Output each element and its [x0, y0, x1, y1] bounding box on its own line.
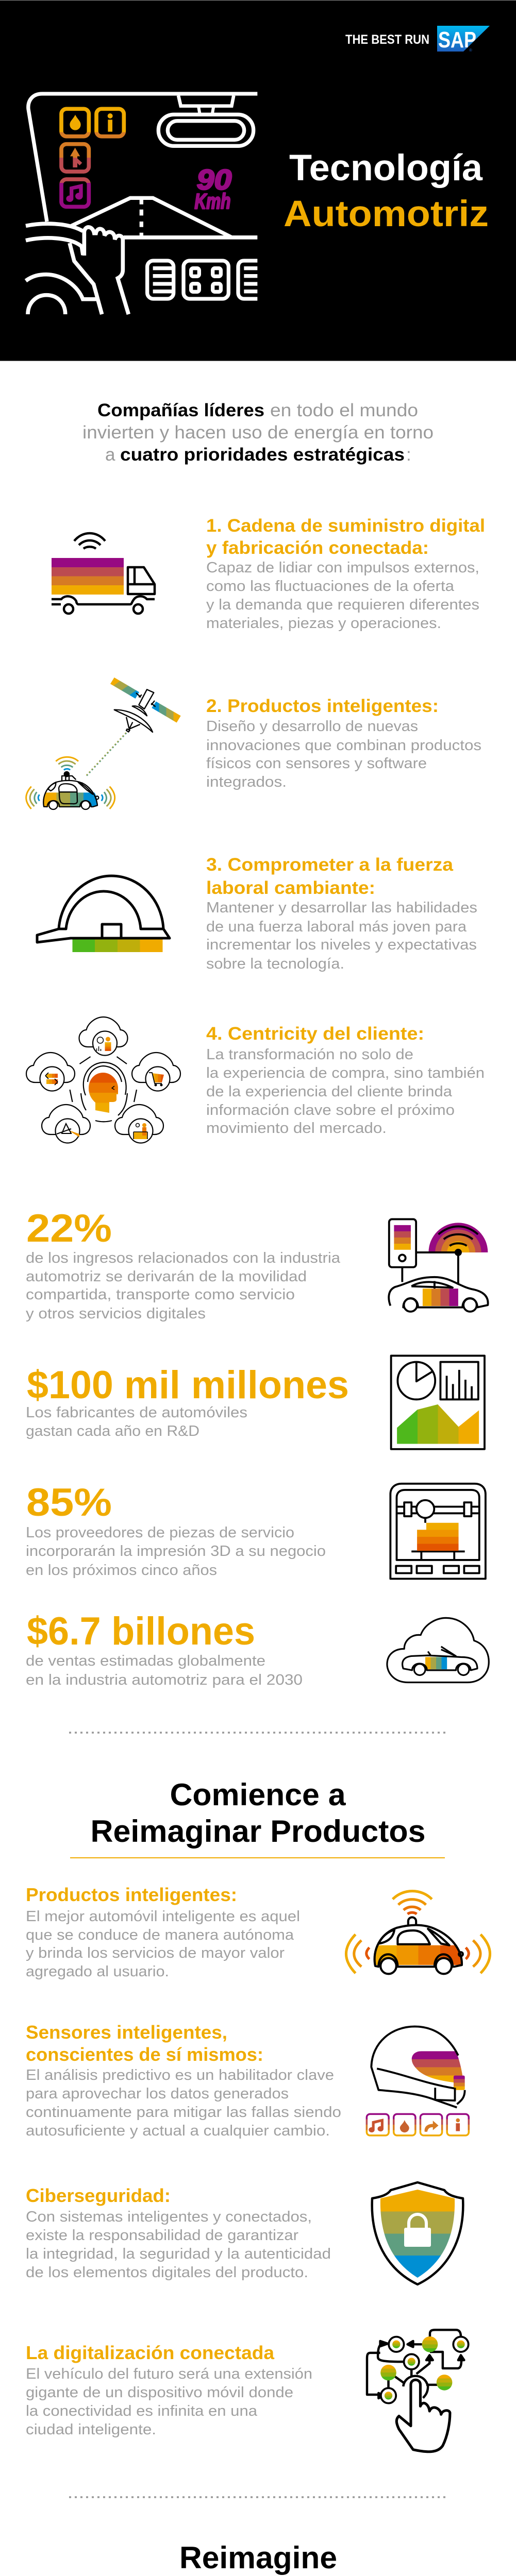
body text: Con sistemas inteligentes y conectados,: [26, 2209, 312, 2225]
icon: dashboard charts: [391, 1355, 485, 1449]
description: de los ingresos relacionados con la industria: [26, 1250, 341, 1266]
signal waves: [26, 757, 115, 809]
logo: The Best Run SAP: [345, 26, 490, 53]
panel: stat 22%: [26, 1207, 488, 1322]
body text: y brinda los servicios de mayor valor: [26, 1945, 285, 1961]
big number: 22%: [26, 1207, 112, 1250]
body text: la integridad, la seguridad y la autenticidad: [26, 2246, 331, 2262]
speed readout: Kmh: [194, 189, 230, 213]
heading: conscientes de sí mismos:: [26, 2044, 263, 2065]
body text: El mejor automóvil inteligente es aquel: [26, 1908, 300, 1925]
body text: integrados.: [206, 774, 287, 790]
heading: Comience a Reimaginar Productos: Comience a: [170, 1777, 346, 1812]
heading: y fabricación conectada:: [206, 538, 429, 558]
body text: [26, 1908, 300, 1980]
body text: El análisis predictivo es un habilitador clave: [26, 2067, 334, 2083]
description: compartida, transporte como servicio: [26, 1286, 295, 1303]
body text: existe la responsabilidad de garantizar: [26, 2227, 298, 2244]
panel: priority 2: [26, 677, 481, 809]
description: en la industria automotriz para el 2030: [26, 1672, 303, 1688]
panel: priority 3: [37, 855, 477, 972]
body text: de una fuerza laboral más joven para: [206, 919, 467, 935]
description: Los fabricantes de automóviles: [26, 1404, 247, 1421]
description: incorporarán la impresión 3D a su negocio: [26, 1543, 326, 1560]
body text: [206, 1046, 485, 1137]
icon: smart helmet with gauges: [367, 2026, 469, 2136]
body text: gigante de un dispositivo móvil donde: [26, 2384, 293, 2401]
body text: continuamente para mitigar las fallas siendo: [26, 2104, 341, 2121]
heading: 1. Cadena de suministro digital: [206, 516, 485, 536]
panel: header background: [0, 0, 516, 361]
panel: stat $6.7 billones: [26, 1609, 489, 1688]
head with arcs: [70, 1057, 137, 1122]
description: en los próximos cinco años: [26, 1562, 217, 1579]
description: [26, 1524, 326, 1579]
panel: stat 85%: [26, 1481, 486, 1579]
body text: de la experiencia del cliente brinda: [206, 1083, 453, 1100]
body text: para aprovechar los datos generados: [26, 2086, 289, 2102]
panel: stat $100 mil millones: [26, 1355, 485, 1449]
body text: información clave sobre el próximo: [206, 1102, 455, 1118]
icon: car in the cloud: [387, 1618, 489, 1683]
bottom left cloud: [42, 1105, 90, 1143]
body text: materiales, piezas y operaciones.: [206, 615, 441, 632]
description: automotriz se derivarán de la movilidad: [26, 1268, 307, 1285]
steering wheel and hand: [26, 224, 128, 314]
body text: físicos con sensores y software: [206, 755, 427, 772]
icon: satellite linked to autonomous car: [26, 677, 181, 809]
description: [26, 1653, 303, 1688]
big number: $6.7 billones: [27, 1609, 255, 1653]
description: [26, 1250, 341, 1322]
panel: digitalización conectada: [26, 2330, 469, 2452]
windshield frame: [28, 94, 257, 222]
body text: La transformación no solo de: [206, 1046, 413, 1063]
intro text: a: [105, 445, 115, 465]
heading: Ciberseguridad:: [26, 2185, 171, 2206]
intro text: en todo el mundo: [270, 400, 418, 420]
rear-view mirror: [158, 95, 254, 146]
body text: incrementar los niveles y expectativas: [206, 937, 477, 953]
speed readout: [194, 164, 232, 213]
body text: que se conduce de manera autónoma: [26, 1927, 294, 1943]
divider: [69, 1732, 446, 1734]
body text: sobre la tecnología.: [206, 956, 344, 972]
speed readout: 90: [197, 164, 232, 196]
icon: 3D printer: [390, 1484, 486, 1579]
description: y otros servicios digitales: [26, 1306, 206, 1322]
HUD icons: drop, info, arrow, music: [61, 109, 124, 207]
icon: phone, signal and car: [389, 1219, 488, 1312]
intro text: cuatro prioridades estratégicas: [120, 445, 405, 465]
body text: ciudad inteligente.: [26, 2421, 156, 2438]
title: [284, 148, 489, 234]
body text: [26, 2366, 312, 2438]
heading: [206, 855, 454, 898]
logo: The Best Run SAP: ®: [469, 48, 472, 53]
title: Automotriz: [284, 194, 489, 234]
heading: laboral cambiante:: [206, 878, 375, 898]
heading: Comience a Reimaginar Productos: Reimaginar Productos: [91, 1814, 425, 1849]
road: [71, 198, 257, 240]
body text: la conectividad es infinita en una: [26, 2403, 258, 2419]
dashboard vents: [147, 261, 257, 299]
intro text: invierten y hacen uso de energía en torno: [82, 422, 434, 443]
panel: sensores inteligentes: [26, 2022, 469, 2139]
body text: como las fluctuaciones de la oferta: [206, 578, 455, 595]
signal dotted line: [86, 733, 126, 776]
panel: productos inteligentes: [26, 1884, 490, 1980]
icon: touch network: [367, 2330, 469, 2452]
heading: 4. Centricity del cliente:: [206, 1024, 424, 1044]
body text: [206, 560, 479, 632]
top cloud: [79, 1017, 128, 1055]
body text: Diseño y desarrollo de nuevas: [206, 718, 418, 735]
panel: priority 4: [26, 1017, 485, 1143]
body text: y la demanda que requieren diferentes: [206, 597, 479, 613]
big number: 85%: [26, 1481, 112, 1524]
heading: Reimagine Modelos de Negocio: Reimagine: [179, 2540, 337, 2575]
body text: [206, 900, 477, 972]
body text: [26, 2067, 341, 2139]
body text: movimiento del mercado.: [206, 1120, 387, 1137]
body text: autosuficiente y actual a cualquier cambio.: [26, 2123, 330, 2139]
icon: customer surrounded by clouds: [26, 1017, 180, 1143]
right cloud: [132, 1053, 180, 1091]
heading: [26, 2022, 263, 2065]
intro text: :: [406, 445, 411, 465]
divider: [69, 2496, 446, 2498]
icon: security shield: [372, 2182, 463, 2284]
body text: la experiencia de compra, sino también: [206, 1065, 485, 1081]
illustration: car dashboard: [26, 94, 257, 314]
heading: Sensores inteligentes,: [26, 2022, 227, 2043]
intro text: [82, 400, 434, 465]
body text: innovaciones que combinan productos: [206, 737, 481, 754]
body text: de los elementos digitales del producto.: [26, 2264, 308, 2281]
title: Tecnología: [289, 148, 483, 189]
bottom right cloud: [115, 1105, 163, 1143]
panel: priority 1: [52, 516, 485, 632]
top hairline: [0, 0, 516, 1]
heading: La digitalización conectada: [26, 2342, 275, 2363]
heading: Productos inteligentes:: [26, 1884, 237, 1905]
body text: [206, 718, 481, 790]
description: Los proveedores de piezas de servicio: [26, 1524, 294, 1541]
heading: 2. Productos inteligentes:: [206, 696, 439, 716]
satellite: [110, 677, 181, 732]
icon: hard hat: [37, 876, 170, 952]
heading: 3. Comprometer a la fuerza: [206, 855, 454, 875]
big number: $100 mil millones: [27, 1363, 349, 1407]
body text: El vehículo del futuro será una extensión: [26, 2366, 312, 2382]
body text: Capaz de lidiar con impulsos externos,: [206, 560, 479, 576]
body text: [26, 2209, 331, 2281]
icon: autonomous car with signals: [346, 1891, 490, 1974]
autonomous car: [43, 772, 98, 809]
description: [26, 1404, 247, 1439]
body text: agregado al usuario.: [26, 1963, 169, 1980]
intro text: Compañías líderes: [97, 400, 264, 420]
description: de ventas estimadas globalmente: [26, 1653, 265, 1669]
panel: ciberseguridad: [26, 2182, 463, 2284]
icon: connected truck: [52, 533, 155, 614]
logo: The Best Run SAP: THE BEST RUN: [345, 32, 429, 47]
heading: Comience a Reimaginar Productos: [70, 1777, 445, 1858]
heading: [206, 516, 485, 558]
body text: Mantener y desarrollar las habilidades: [206, 900, 477, 916]
logo: The Best Run SAP: SAP: [438, 27, 476, 53]
description: gastan cada año en R&D: [26, 1423, 199, 1439]
left cloud: [26, 1053, 75, 1091]
